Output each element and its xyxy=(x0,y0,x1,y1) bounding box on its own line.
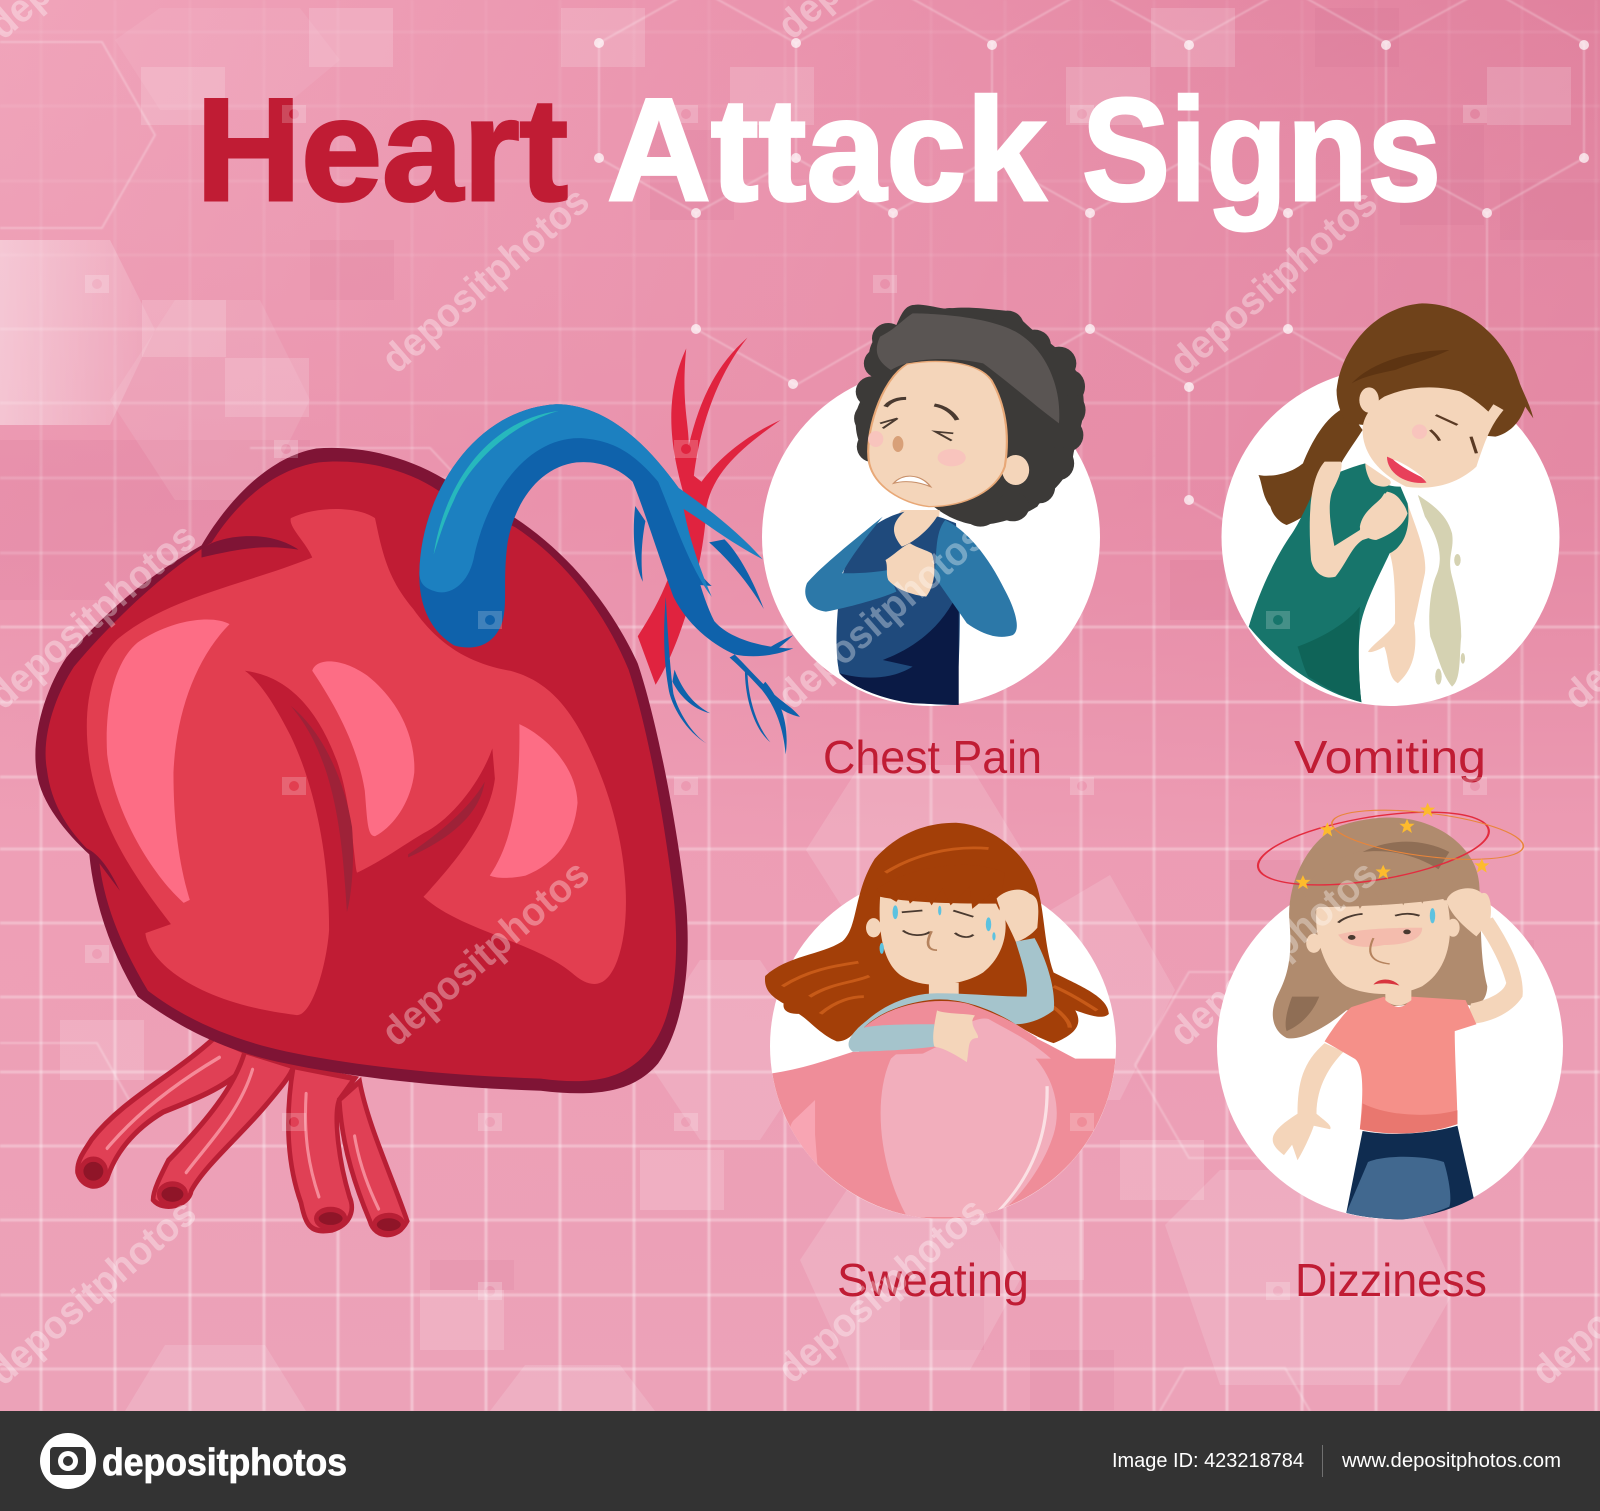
title xyxy=(196,68,1441,231)
icon: dizzy person xyxy=(1245,798,1530,1219)
icon: person with chest pain xyxy=(805,305,1086,705)
panel: sweating xyxy=(750,823,1119,1238)
circle: dizziness backdrop xyxy=(1217,873,1563,1219)
icon: person vomiting xyxy=(1249,303,1533,702)
circle: chest pain backdrop xyxy=(762,368,1100,706)
dizzy rings xyxy=(1245,798,1530,899)
title: Signs xyxy=(1082,68,1441,231)
title: Attack xyxy=(607,68,1047,231)
watermarks: depositphotos xyxy=(769,515,994,718)
label: dizziness: Dizziness xyxy=(1295,1254,1487,1306)
watermarks: depositphotos xyxy=(769,1189,994,1392)
panel: chest pain xyxy=(762,305,1100,706)
icon: heart with vessels xyxy=(35,338,800,1235)
title: Heart xyxy=(196,68,568,231)
circle: vomiting backdrop xyxy=(1222,368,1560,706)
heart highlights xyxy=(107,619,578,903)
footer bar xyxy=(0,1411,1600,1511)
blue vein xyxy=(419,404,800,754)
heart light panels xyxy=(87,509,626,1015)
watermarks: depositphotos xyxy=(1161,181,1386,384)
red arteries behind heart xyxy=(638,338,781,685)
stars xyxy=(1295,803,1489,889)
curly hair bumps xyxy=(854,305,1086,527)
icon: person sweating under blanket xyxy=(750,823,1119,1238)
circle: sweating backdrop xyxy=(770,873,1116,1219)
heart body xyxy=(46,462,676,1081)
image id: Image ID: 423218784 xyxy=(1112,1450,1304,1472)
website: www.depositphotos.com xyxy=(1341,1450,1561,1472)
lower vessels xyxy=(77,1038,407,1235)
watermarks: depositphotos xyxy=(1161,852,1386,1055)
label: chest pain: Chest Pain xyxy=(823,731,1042,783)
heart outline xyxy=(35,448,688,1093)
logo wordmark: depositphotos xyxy=(102,1442,347,1484)
label: vomiting: Vomiting xyxy=(1294,731,1486,783)
panel: vomiting xyxy=(1222,303,1560,706)
label: sweating: Sweating xyxy=(837,1254,1029,1306)
icon: camera logo xyxy=(40,1433,96,1489)
panel: dizziness xyxy=(1217,798,1563,1219)
watermark camera icons xyxy=(85,105,1487,1300)
watermarks: depositphotos xyxy=(373,852,598,1055)
watermarks: depositphotos xyxy=(373,179,598,382)
